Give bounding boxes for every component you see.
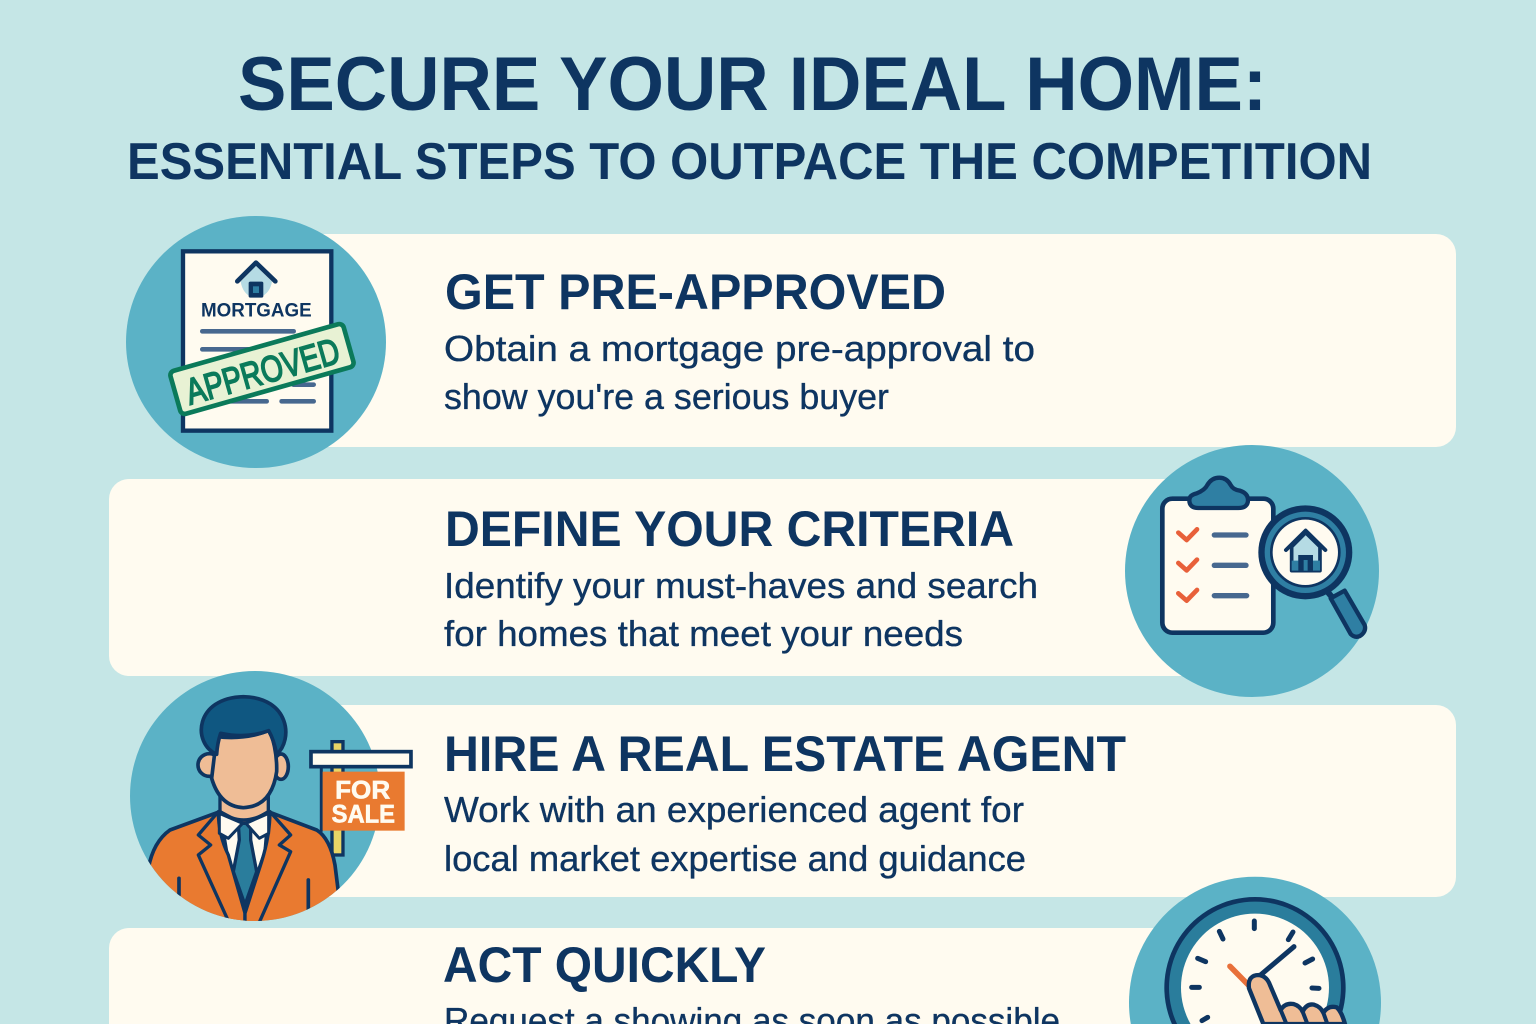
sign post [332, 742, 343, 855]
panel: hire a real estate agent [300, 705, 1456, 897]
icon: house [237, 263, 275, 298]
panel: define your criteria [109, 479, 1229, 676]
heading: hire a real estate agent: HIRE A REAL ESTATE AGENT [444, 726, 1126, 782]
title [127, 42, 1372, 191]
lapels [198, 812, 245, 928]
document [183, 251, 331, 431]
text: get pre-approved description: show you're a serious buyer [444, 376, 889, 417]
icon: checklist and magnifying glass [1125, 445, 1379, 697]
icon: agent with for sale sign: SALE [332, 801, 395, 829]
person [147, 797, 343, 932]
stamp: approved: APPROVED [181, 330, 344, 413]
document lines [202, 331, 314, 401]
text: define your criteria description: for homes that meet your needs [444, 613, 963, 654]
face [212, 730, 277, 808]
house in lens [1286, 531, 1325, 571]
text: define your criteria description: Identify your must-haves and search [444, 565, 1038, 606]
mortgage label: MORTGAGE [201, 301, 312, 322]
main heading: SECURE YOUR IDEAL HOME: [238, 42, 1267, 127]
clipboard [1162, 499, 1273, 633]
neck [220, 797, 268, 820]
tie [233, 823, 257, 905]
text: hire an agent description: Work with an experienced agent for [444, 789, 1024, 830]
checkmarks [1178, 529, 1197, 601]
jacket [148, 810, 340, 921]
panel: get pre-approved [300, 234, 1456, 447]
text: hire an agent description [444, 789, 1026, 879]
text: define your criteria description [444, 565, 1038, 654]
icon: agent with for sale sign [130, 671, 411, 932]
shirt [220, 812, 268, 908]
text: get pre-approved description [444, 328, 1035, 417]
collar [219, 813, 269, 838]
text: hire an agent description: local market expertise and guidance [444, 838, 1026, 879]
icon: mortgage document with approved stamp [126, 216, 386, 468]
subheading: ESSENTIAL STEPS TO OUTPACE THE COMPETITION [127, 133, 1372, 191]
ears [198, 754, 221, 776]
heading: get pre-approved: GET PRE-APPROVED [445, 264, 946, 320]
clock hands [1230, 966, 1252, 988]
panel: act quickly [109, 928, 1229, 1024]
sign board [311, 752, 411, 767]
icon: agent with for sale sign: FOR [335, 777, 390, 805]
heading: act quickly: ACT QUICKLY [443, 937, 766, 993]
magnifier lens [1258, 505, 1352, 599]
pointing hand [1249, 975, 1345, 1024]
hair [201, 697, 286, 754]
clock face [1164, 897, 1346, 1024]
text: get pre-approved description: Obtain a mortgage pre-approval to [444, 328, 1035, 369]
tick marks [1192, 921, 1319, 1021]
heading: define your criteria: DEFINE YOUR CRITERIA [445, 501, 1014, 557]
for sale placard [323, 772, 405, 831]
icon: clock with pointing hand [1129, 877, 1381, 1024]
magnifier handle [1323, 587, 1365, 637]
checklist lines [1214, 535, 1247, 596]
